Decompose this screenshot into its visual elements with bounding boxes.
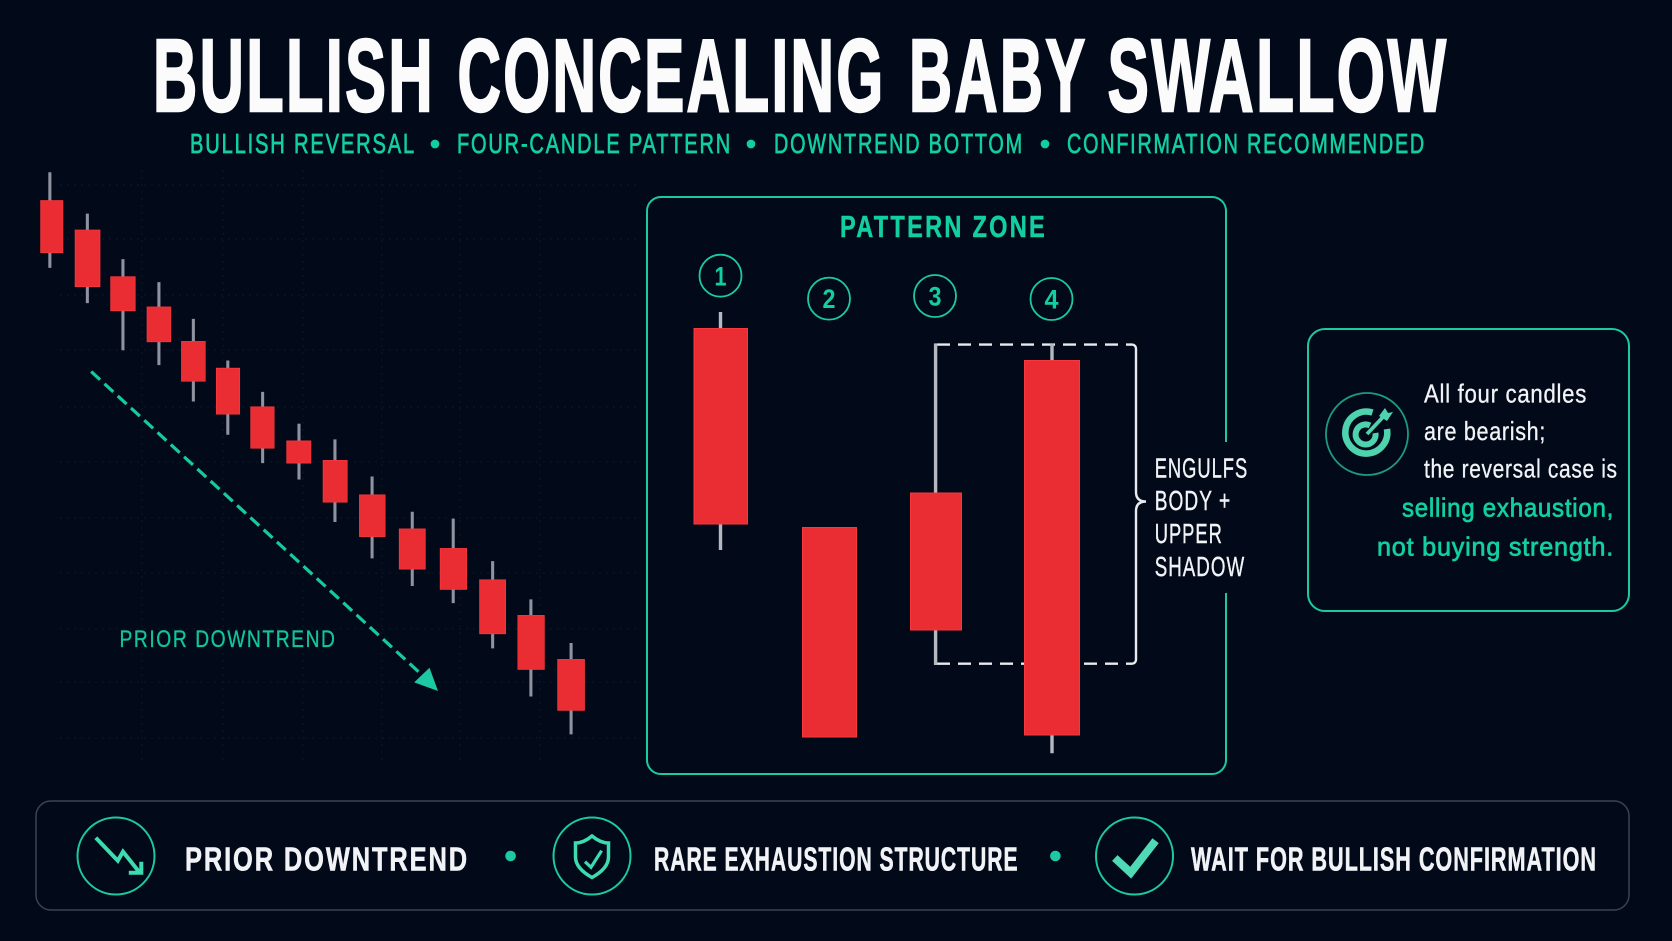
arrow: prior downtrend bbox=[91, 372, 438, 691]
callout text bbox=[1377, 379, 1618, 562]
callout text: are bearish; bbox=[1424, 416, 1546, 446]
candle 12 bbox=[440, 519, 467, 603]
panel heading: PATTERN ZONE bbox=[840, 209, 1047, 244]
annotation: engulfs body + upper shadow: SHADOW bbox=[1155, 551, 1245, 582]
subtitle: DOWNTREND BOTTOM bbox=[774, 128, 1024, 159]
candle 3 bbox=[910, 343, 962, 665]
candle 3 bbox=[111, 259, 135, 350]
panel border bbox=[647, 197, 1226, 774]
callout text: All four candles bbox=[1424, 379, 1587, 409]
candle 5 bbox=[181, 319, 205, 401]
step badge 3: 3 bbox=[928, 282, 942, 312]
title bbox=[153, 18, 1448, 133]
icon: target with arrow bbox=[1326, 393, 1408, 475]
annotation: engulfs body + upper shadow: BODY + bbox=[1155, 485, 1231, 516]
label: prior downtrend: PRIOR DOWNTREND bbox=[120, 626, 336, 653]
subtitle: CONFIRMATION RECOMMENDED bbox=[1067, 128, 1426, 159]
callout text: selling exhaustion, bbox=[1402, 493, 1614, 523]
step badge 2 bbox=[808, 278, 850, 320]
panel: pattern zone bbox=[647, 197, 1248, 774]
candle 4 bbox=[1024, 343, 1080, 753]
step badge 4: 4 bbox=[1044, 284, 1058, 314]
candle 11 bbox=[399, 512, 425, 586]
annotation: engulfs body + upper shadow: ENGULFS bbox=[1155, 453, 1248, 484]
step badge 1: 1 bbox=[714, 262, 726, 292]
footer frame bbox=[36, 801, 1629, 910]
annotation: engulfs body + upper shadow bbox=[1155, 453, 1248, 582]
title: CONCEALING bbox=[458, 18, 886, 133]
candle 9 bbox=[323, 439, 347, 522]
candle 4 bbox=[147, 282, 171, 365]
candle 1 bbox=[41, 172, 63, 268]
candlestick chart: prior downtrend bbox=[41, 172, 584, 734]
title: BABY bbox=[909, 18, 1088, 133]
icon: check mark bbox=[1096, 818, 1173, 894]
subtitle bbox=[190, 128, 1426, 159]
step badge 1 bbox=[700, 255, 742, 297]
step badge 2: 2 bbox=[822, 284, 836, 314]
icon: downtrend bbox=[78, 818, 154, 894]
separator dot bbox=[1050, 851, 1061, 861]
step badge 4 bbox=[1030, 278, 1072, 320]
candle 7 bbox=[251, 392, 274, 463]
candle 15 bbox=[558, 643, 584, 734]
footer bar bbox=[36, 801, 1629, 910]
separator dot bbox=[505, 851, 516, 861]
item: rare exhaustion structure: RARE EXHAUSTION STRUCTURE bbox=[654, 842, 1018, 878]
candle 10 bbox=[359, 476, 385, 558]
title: SWALLOW bbox=[1108, 18, 1448, 133]
subtitle: FOUR-CANDLE PATTERN bbox=[457, 128, 732, 159]
icon: shield bbox=[554, 818, 630, 894]
candle 13 bbox=[480, 561, 506, 648]
callout border bbox=[1308, 329, 1629, 611]
candle 2 bbox=[75, 214, 100, 303]
candle 8 bbox=[287, 424, 311, 480]
candle 14 bbox=[518, 599, 544, 697]
title: BULLISH bbox=[153, 18, 435, 133]
candle 1 bbox=[694, 312, 748, 550]
annotation: engulfs body + upper shadow: UPPER bbox=[1155, 518, 1223, 549]
bracket: engulfing range bbox=[937, 345, 1146, 664]
candle 2 bbox=[802, 528, 856, 737]
subtitle: BULLISH REVERSAL bbox=[190, 128, 416, 159]
item: prior downtrend: PRIOR DOWNTREND bbox=[185, 842, 469, 878]
callout text: the reversal case is bbox=[1424, 454, 1618, 484]
candle 6 bbox=[216, 361, 240, 435]
panel: insight callout bbox=[1308, 329, 1629, 611]
step badge 3 bbox=[914, 275, 956, 317]
callout text: not buying strength. bbox=[1377, 532, 1614, 562]
